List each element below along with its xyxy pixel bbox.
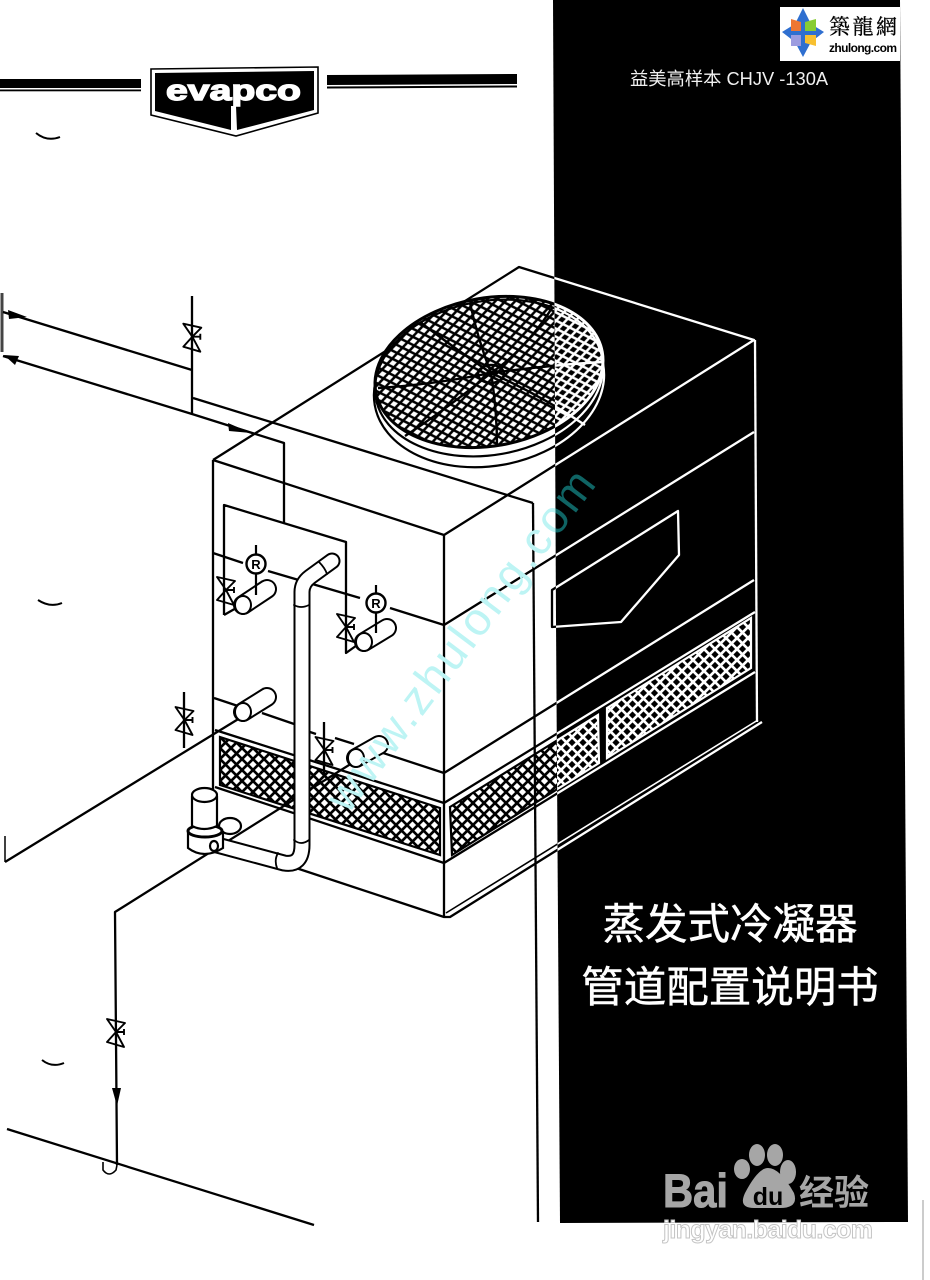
recirculation pump bbox=[188, 788, 241, 854]
valves bbox=[107, 324, 355, 1047]
valve: centre lower bbox=[316, 737, 334, 765]
Baidu watermark bbox=[662, 1144, 873, 1244]
Baidu watermark: jingyan.baidu.com bbox=[662, 1216, 873, 1244]
Baidu watermark: du bbox=[753, 1183, 783, 1211]
header bars and EVAPCO logo bbox=[0, 67, 517, 136]
pressure relief gauges: R bbox=[371, 596, 381, 611]
header bars and EVAPCO logo: evapco bbox=[166, 75, 301, 107]
condenser cabinet outline bbox=[213, 267, 762, 917]
title: 蒸发式冷凝器 bbox=[602, 902, 858, 949]
icon: four-colour star bbox=[782, 8, 824, 57]
pressure relief gauges: R bbox=[251, 557, 261, 572]
zhulong logo box: 築龍網 bbox=[829, 11, 900, 41]
title: 管道配置说明书 bbox=[581, 965, 879, 1012]
icon: paw bbox=[734, 1144, 796, 1208]
valve: top bbox=[183, 324, 201, 352]
title bbox=[581, 902, 879, 1012]
Baidu watermark: Bai bbox=[663, 1164, 728, 1217]
valve: drain bbox=[107, 1019, 125, 1047]
zhulong logo box: zhulong.com bbox=[829, 41, 897, 55]
louver panels bbox=[220, 618, 751, 855]
supply and return piping bbox=[3, 296, 538, 1225]
valve: right riser bbox=[337, 614, 355, 642]
flow arrows bbox=[4, 310, 251, 1106]
Baidu watermark: 经验 bbox=[799, 1174, 869, 1213]
valve: left riser bbox=[217, 577, 235, 605]
watermark on white: www.zhulong.com bbox=[314, 459, 605, 822]
model label: 益美高样本 CHJV -130A bbox=[630, 68, 829, 89]
water riser pipe bbox=[217, 561, 332, 868]
zhulong logo box bbox=[780, 7, 900, 61]
cooling fan guard bbox=[361, 279, 617, 485]
valve: left lower bbox=[176, 707, 194, 735]
pressure relief gauges bbox=[246, 545, 386, 633]
watermark on black: www.zhulong.com bbox=[314, 459, 605, 822]
panel: black inverted half bbox=[553, 0, 908, 1223]
pipe stubs bbox=[235, 589, 387, 767]
